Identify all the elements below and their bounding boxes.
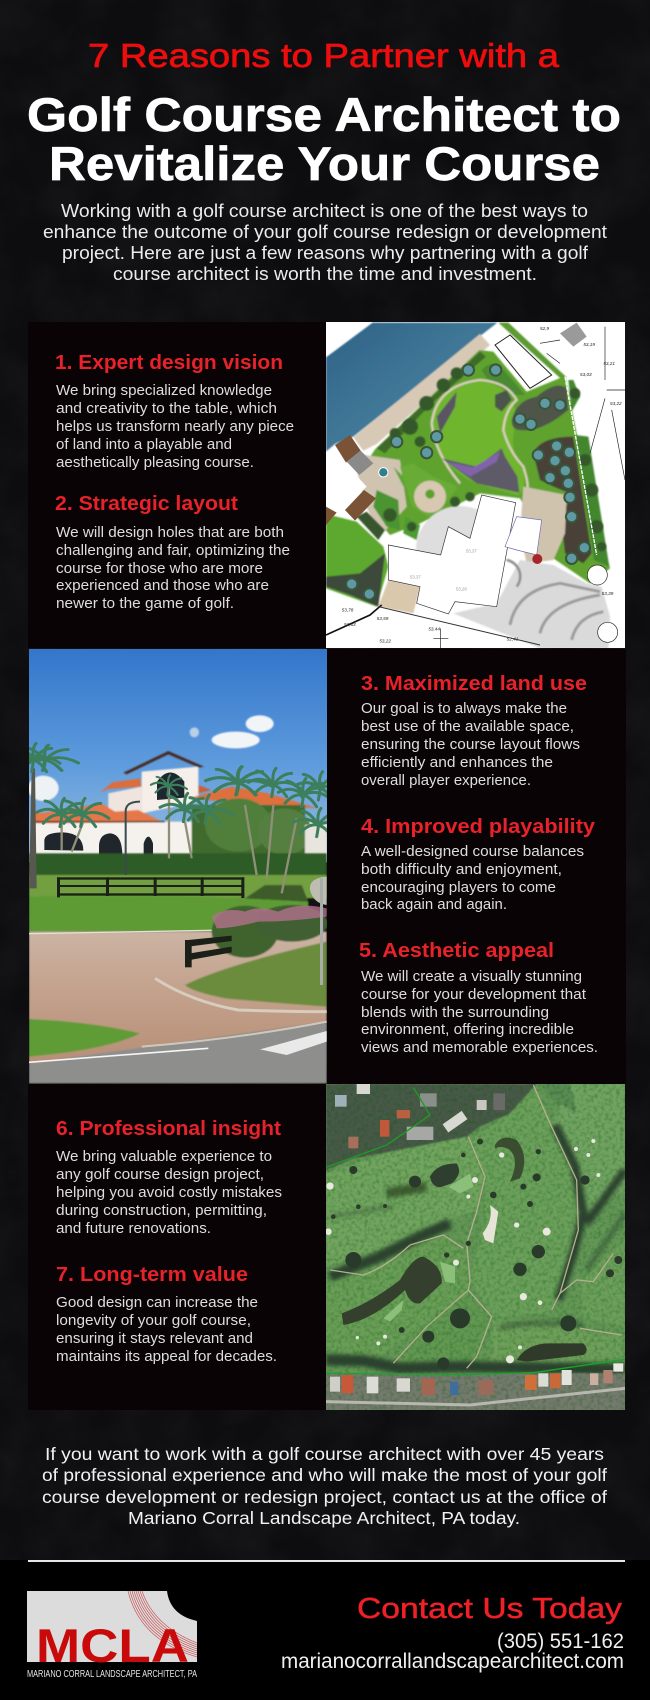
closing paragraph: If you want to work with a golf course architect with over 45 years <box>45 1444 604 1464</box>
image: landscape site plan: 53,22 <box>379 638 391 643</box>
text: reason 5 <box>361 968 598 1056</box>
text: reason 6: We bring valuable experience to <box>56 1148 272 1165</box>
closing paragraph: course development or redesign project, contact us at the office of <box>42 1487 607 1507</box>
text: reason 1: and creativity to the table, which <box>56 400 277 417</box>
intro paragraph: course architect is worth the time and investment. <box>113 264 537 284</box>
text: reason 5: We will create a visually stunning <box>361 968 582 985</box>
text: reason 4: both difficulty and enjoyment, <box>361 861 562 878</box>
text: reason 1 <box>56 382 294 471</box>
heading: reason 7: 7. Long-term value <box>56 1264 248 1286</box>
text: reason 4: A well-designed course balances <box>361 843 584 860</box>
heading: reason 1: 1. Expert design vision <box>55 352 283 374</box>
image: landscape site plan: 53,63 <box>344 622 356 627</box>
image: landscape site plan: 52,9 <box>540 326 549 331</box>
text: reason 7: ensuring it stays relevant and <box>56 1330 253 1347</box>
title line: red kicker: 7 Reasons to Partner with a <box>88 37 560 74</box>
website: marianocorrallandscapearchitect.com <box>281 1650 624 1673</box>
image: landscape site plan: 52,41 <box>507 637 519 642</box>
image: clubhouse street photo <box>8 649 347 1083</box>
text: reason 6: during construction, permitting, <box>56 1202 267 1219</box>
logo: MCLA: MCLA <box>36 1619 189 1672</box>
image: landscape site plan: 53,44 <box>428 627 440 632</box>
image: aerial view of golf course <box>325 1084 625 1410</box>
text: reason 4: encouraging players to come <box>361 879 556 896</box>
intro paragraph: project. Here are just a few reasons why partnering with a golf <box>62 243 589 263</box>
logo: MCLA <box>27 1591 197 1680</box>
image: landscape site plan: 53,59 <box>377 616 389 621</box>
text: reason 6: and future renovations. <box>56 1220 211 1237</box>
text: reason 3: ensuring the course layout flows <box>361 736 580 753</box>
panel: reasons 6 and 7 <box>28 1084 327 1410</box>
image: landscape site plan: 53,21 <box>603 361 615 366</box>
title <box>27 37 621 190</box>
text: reason 1: We bring specialized knowledge <box>56 382 272 399</box>
text: reason 1: helps us transform nearly any piece <box>56 418 294 435</box>
logo: MCLA: MARIANO CORRAL LANDSCAPE ARCHITECT, PA <box>27 1669 197 1680</box>
text: reason 5: course for your development that <box>361 986 587 1003</box>
text: reason 2: course for those who are more <box>56 560 263 577</box>
text: reason 1: of land into a playable and <box>56 436 232 453</box>
text: reason 3: overall player experience. <box>361 772 531 789</box>
text: reason 3: efficiently and enhances the <box>361 754 553 771</box>
closing paragraph <box>42 1444 607 1528</box>
title line: main headline 2: Revitalize Your Course <box>49 137 600 190</box>
text: reason 5: views and memorable experiences. <box>361 1039 598 1056</box>
text: reason 7: longevity of your golf course, <box>56 1312 251 1329</box>
image: landscape site plan: 53,39 <box>602 591 614 596</box>
text: reason 7: Good design can increase the <box>56 1294 258 1311</box>
text: reason 1: aesthetically pleasing course. <box>56 454 254 471</box>
image: landscape site plan: 53,28 <box>456 587 467 592</box>
text: reason 7: maintains its appeal for decades. <box>56 1348 277 1365</box>
text: reason 2 <box>56 524 290 612</box>
text: reason 2: challenging and fair, optimizing the <box>56 542 290 559</box>
heading: reason 5: 5. Aesthetic appeal <box>359 940 554 962</box>
image: landscape site plan: 53,37 <box>410 574 421 579</box>
text: reason 7 <box>56 1294 277 1365</box>
image: landscape site plan: 53,03 <box>580 372 592 377</box>
contact heading: Contact Us Today <box>357 1593 623 1625</box>
image: landscape site plan: 53,19 <box>583 342 595 347</box>
text: reason 3: best use of the available space, <box>361 718 574 735</box>
text: reason 3 <box>361 700 580 789</box>
text: reason 5: environment, offering incredible <box>361 1021 574 1038</box>
panel: reasons 3, 4 and 5 <box>327 649 626 1084</box>
text: reason 4: back again and again. <box>361 896 507 913</box>
panel: reasons 1 and 2 <box>28 322 327 648</box>
text: reason 2: We will design holes that are both <box>56 524 284 541</box>
image: landscape site plan <box>326 322 625 648</box>
text: reason 6: helping you avoid costly mistakes <box>56 1184 282 1201</box>
heading: reason 6: 6. Professional insight <box>56 1118 281 1140</box>
image: landscape site plan: 53,22 <box>610 401 622 406</box>
image: landscape site plan: 53,37 <box>466 549 477 554</box>
text: reason 4 <box>361 843 584 913</box>
intro paragraph: Working with a golf course architect is one of the best ways to <box>61 201 588 221</box>
heading: reason 4: 4. Improved playability <box>361 816 596 838</box>
text: reason 2: experienced and those who are <box>56 577 269 594</box>
text: reason 6 <box>56 1148 282 1237</box>
footer <box>0 1560 650 1700</box>
intro paragraph <box>43 201 607 284</box>
phone number: (305) 551-162 <box>497 1630 624 1653</box>
closing paragraph: of professional experience and who will make the most of your golf <box>42 1465 607 1485</box>
text: reason 6: any golf course design project, <box>56 1166 264 1183</box>
title line: main headline 1: Golf Course Architect to <box>27 88 621 141</box>
image: landscape site plan: 53,78 <box>342 608 354 613</box>
heading: reason 2: 2. Strategic layout <box>55 493 238 515</box>
heading: reason 3: 3. Maximized land use <box>361 673 587 695</box>
intro paragraph: enhance the outcome of your golf course redesign or development <box>43 222 607 242</box>
closing paragraph: Mariano Corral Landscape Architect, PA today. <box>128 1508 520 1528</box>
text: reason 5: blends with the surrounding <box>361 1004 549 1021</box>
text: reason 2: newer to the game of golf. <box>56 595 234 612</box>
text: reason 3: Our goal is to always make the <box>361 700 567 717</box>
